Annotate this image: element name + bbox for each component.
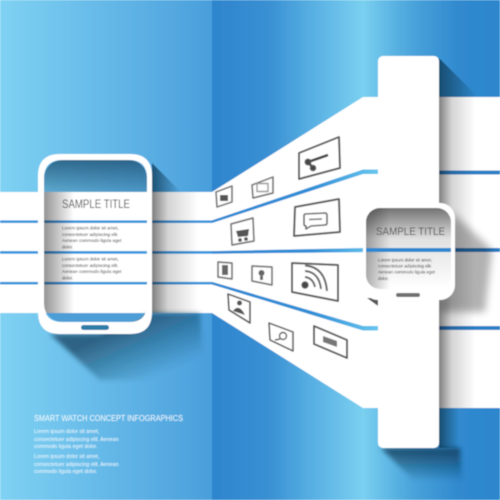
icon: share	[299, 137, 340, 179]
intro text block 1: commodo ligula eget dolor.	[34, 444, 97, 450]
icon: user	[228, 294, 250, 323]
icon: laptop	[216, 186, 232, 207]
watch strap	[378, 56, 439, 448]
icon: wifi signal	[292, 263, 338, 301]
intro text block 2: consectetuer adipiscing elit. Aenean	[34, 462, 119, 468]
phone text block 1: dolor.	[62, 244, 73, 249]
watch text block: consectetuer adipiscing elit.	[378, 264, 432, 268]
intro text block 1: Lorem ipsum dolor sit amet,	[34, 429, 99, 435]
shadow: strap on blue	[381, 58, 478, 480]
phone text block 2: consectetuer adipiscing elit.	[62, 263, 118, 268]
background: right panel	[212, 0, 500, 500]
icon: cart	[231, 218, 254, 245]
intro text block 1: consectetuer adipiscing elit. Aenean	[34, 437, 119, 443]
intro text block 2: Lorem ipsum dolor sit amet,	[34, 454, 99, 460]
phone text block 2: Lorem ipsum dolor sit amet,	[62, 256, 119, 262]
phone text block 1: Lorem ipsum dolor sit amet,	[62, 226, 119, 230]
icon: screen	[252, 177, 273, 198]
watch button	[396, 293, 420, 297]
watch text block: dolor.	[378, 276, 389, 281]
icon: bulb	[252, 266, 272, 285]
phone text block 2: dolor.	[62, 275, 73, 280]
watch shadow	[440, 212, 492, 312]
white ribbon band	[0, 97, 500, 408]
infographic title: SMART WATCH CONCEPT INFOGRAPHICS	[34, 413, 183, 423]
phone title: SAMPLE TITLE	[62, 199, 130, 211]
phone text block 2: Aenean commodo ligula eget	[62, 269, 122, 274]
icon: document	[218, 262, 232, 279]
background: left panel	[0, 0, 212, 500]
phone body	[38, 154, 152, 334]
icon: search	[269, 323, 293, 351]
watch text block: Aenean commodo ligula eget	[378, 270, 436, 274]
blue ribbon lines	[0, 170, 500, 330]
intro text block 2: commodo ligula eget dolor.	[34, 469, 97, 475]
phone text block 1: consectetuer adipiscing elit.	[62, 232, 118, 237]
watch text block: Lorem ipsum dolor sit amet,	[378, 258, 432, 262]
phone shadow	[50, 163, 205, 380]
icon grid	[216, 137, 347, 358]
phone home button	[81, 325, 109, 330]
watch body	[363, 203, 455, 306]
phone inner screen shading	[44, 160, 147, 322]
icon: chat bubble	[294, 199, 340, 236]
strap right shadow	[439, 97, 475, 408]
icon: card	[314, 326, 347, 358]
watch screen	[366, 208, 451, 289]
watch title: SAMPLE TITLE	[376, 226, 445, 238]
phone text block 1: Aenean commodo ligula eget	[62, 238, 122, 243]
